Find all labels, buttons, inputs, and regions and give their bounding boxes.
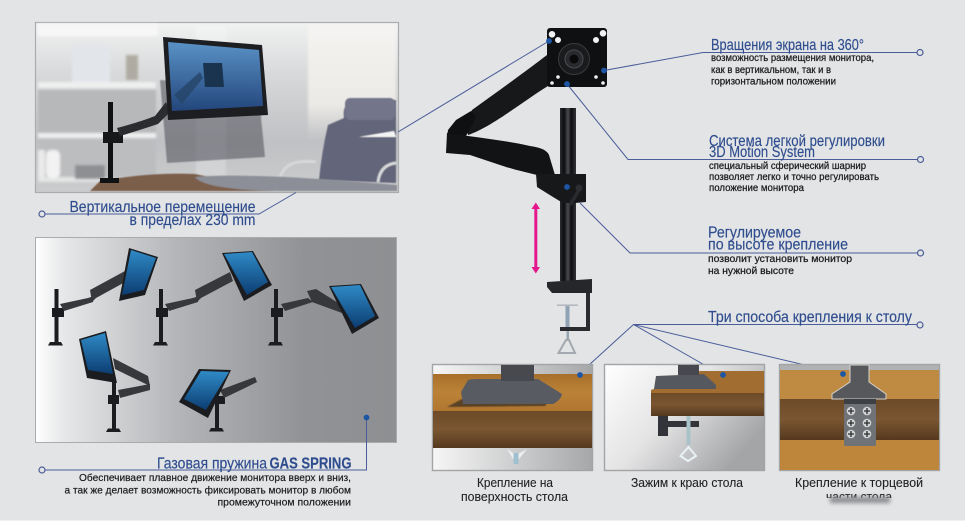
arm position 2 [153, 251, 272, 346]
feature: height adjustable mount [564, 184, 924, 277]
feature: 3D motion system: специальный сферический шарнир [709, 160, 866, 172]
text block: gas spring: промежуточном положении [218, 496, 351, 508]
feature heading: three mounting methods [578, 309, 923, 375]
photo: edge clamp [604, 364, 764, 470]
pole clamp [536, 174, 586, 203]
mounting plate [547, 28, 607, 87]
base shadow [447, 399, 550, 407]
feature heading: three mounting methods: Три способа крепления к столу [708, 309, 912, 326]
leader: gas spring [39, 415, 369, 473]
upper arm [466, 55, 548, 135]
table front [433, 411, 592, 448]
text block: gas spring [64, 456, 352, 508]
arm position 1 [48, 248, 158, 346]
pole [560, 108, 576, 281]
plate with screws [844, 399, 876, 446]
desk arm [100, 102, 170, 183]
arrow: height adjustment [532, 202, 540, 274]
table top [651, 371, 764, 393]
feature: screen rotation: как в вертикальном, так и в [711, 65, 831, 76]
feature: height adjustable mount: на нужной высоте [708, 266, 794, 277]
screw and hook [680, 416, 696, 461]
text block: gas spring: Обеспечивает плавное движение монитора вверх и вниз, [79, 472, 351, 484]
caption: surface mount: поверхность стола [461, 490, 568, 504]
caption: end mount [795, 476, 955, 512]
lower arm [446, 133, 555, 175]
bracket [658, 416, 699, 436]
text block: gas spring: GAS SPRING [270, 456, 352, 472]
lower band [780, 440, 939, 470]
feature: screen rotation: возможность размещения монитора, [711, 53, 874, 64]
arm position 4 [79, 331, 150, 432]
photo: surface mount [432, 364, 592, 470]
lower monitor ghost [160, 80, 265, 163]
arm position 5 [179, 369, 257, 432]
caption: vertical movement: Вертикальное перемещение [70, 199, 256, 216]
feature: 3D motion system: положение монитора [709, 183, 804, 194]
caption: end mount: Крепление к торцевой [795, 476, 923, 490]
feature: 3D motion system [564, 81, 924, 194]
feature: 3D motion system: позволяет легко и точно регулировать [709, 172, 879, 183]
feature: screen rotation: горизонтальном положении [711, 76, 836, 88]
caption: surface mount: Крепление на [477, 476, 553, 490]
caption: end mount: части стола [826, 490, 892, 504]
arm position 3 [268, 284, 379, 346]
text block: gas spring: Газовая пружина [157, 456, 267, 472]
leader: photo to plate [398, 38, 552, 132]
clamp bracket [560, 293, 590, 331]
caption: surface mount [461, 476, 568, 504]
office chair [280, 98, 396, 183]
base [461, 379, 562, 404]
feature: height adjustable mount: по высоте крепление [708, 236, 848, 254]
adjusting knob [570, 184, 582, 205]
desk [90, 174, 397, 191]
clamp base [654, 374, 716, 389]
panel: office photo with monitor [36, 22, 398, 192]
text block: gas spring: а так же делает возможность фиксировать монитор в любом [64, 484, 351, 496]
caption: vertical movement: в пределах 230 mm [130, 212, 256, 229]
clamp screw [557, 304, 578, 353]
table front [651, 393, 764, 416]
post [678, 365, 699, 375]
wing bolt [507, 449, 527, 464]
arm joint [447, 111, 476, 137]
caption: edge clamp: Зажим к краю стола [631, 476, 743, 490]
post and collar [832, 365, 886, 399]
feature: 3D motion system: 3D Motion System [709, 144, 815, 161]
product: monitor arm [446, 28, 607, 353]
feature: screen rotation [601, 37, 923, 88]
top face [780, 370, 939, 399]
feature: screen rotation: Вращения экрана на 360° [711, 37, 864, 54]
shelves and office background [38, 24, 396, 182]
post [501, 365, 534, 381]
panel: gas spring positions [36, 238, 396, 442]
feature: height adjustable mount: позволит установить монитор [708, 254, 852, 265]
photo: end mount [780, 364, 940, 470]
front face [780, 399, 939, 440]
caption: vertical movement [39, 192, 296, 229]
feature: height adjustable mount: Регулируемое [708, 224, 801, 242]
upper monitor [163, 37, 268, 120]
desk base [547, 279, 592, 293]
table top [433, 374, 592, 411]
feature: 3D motion system: Система легкой регулировки [709, 133, 885, 150]
